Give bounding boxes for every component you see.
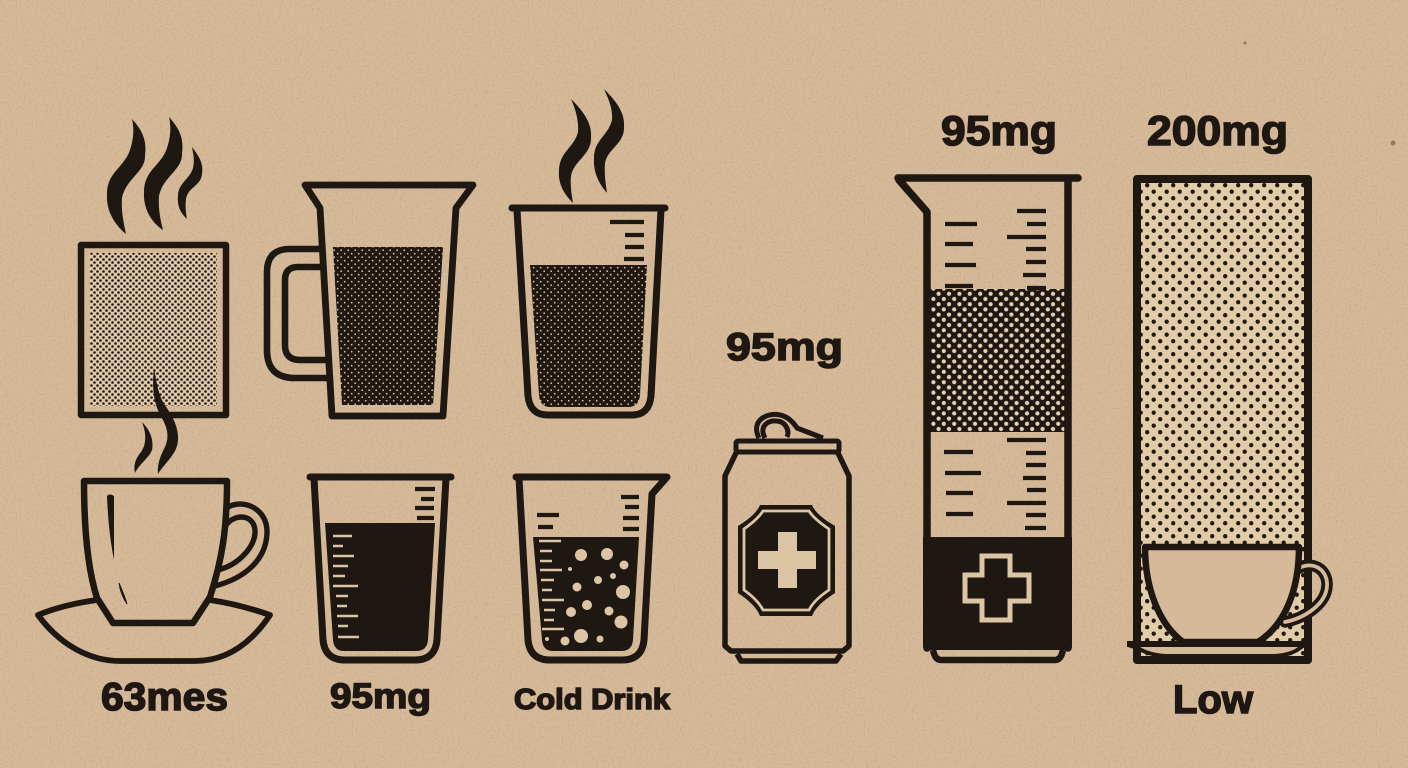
icon: cup steam [134, 368, 178, 474]
item: 200mg tall panel with cup [1127, 107, 1327, 722]
square mug halftone fill [90, 253, 217, 406]
cup saucer [1128, 645, 1304, 656]
cup handle over panel [1285, 565, 1327, 622]
label: 200mg: 200mg [1147, 107, 1288, 154]
label: 63mes: 63mes [101, 676, 228, 719]
item: steaming beaker with halftone [512, 89, 665, 415]
label: 95mg above can: 95mg [726, 326, 843, 369]
mug handle [267, 249, 330, 378]
item: beaker with small mug label [310, 477, 451, 716]
label: Low: Low [1173, 678, 1254, 722]
item: glass mug with handle [267, 185, 473, 416]
item: tall measuring beaker [898, 107, 1078, 660]
panel outline [1137, 179, 1308, 660]
steaming beaker ticks [610, 222, 644, 259]
tall beaker halftone band [927, 289, 1068, 432]
can lid [736, 441, 839, 452]
cold drink beaker outline [516, 477, 667, 660]
cold drink bubbles [545, 548, 630, 646]
can base [737, 654, 841, 661]
can body [725, 453, 849, 651]
steaming beaker liquid [530, 265, 647, 407]
tall beaker foot [933, 650, 1063, 660]
cup saucer [38, 600, 270, 661]
cup handle [215, 504, 267, 586]
cold drink upper ticks [537, 497, 639, 529]
item: coffee cup on saucer [38, 368, 270, 719]
cup highlights [107, 494, 127, 604]
saucer rim [1127, 641, 1304, 647]
icon: beaker steam [559, 89, 624, 203]
cup body [84, 481, 227, 623]
item: cold drink beaker with bubbles [514, 477, 671, 716]
beaker liquid scale ticks [333, 536, 359, 637]
can cross badge [738, 505, 835, 616]
label: 95mg: 95mg [330, 677, 431, 716]
beaker liquid solid [325, 523, 435, 651]
square mug outline [81, 245, 226, 415]
beaker outline [310, 477, 451, 660]
can pull tab [757, 414, 823, 438]
cup body [1145, 547, 1299, 642]
beaker top scale ticks [415, 489, 435, 518]
tall beaker cross [965, 556, 1029, 620]
mug outline [305, 185, 473, 416]
icon: steam above square mug [107, 117, 202, 234]
tall beaker upper ticks [945, 211, 1046, 288]
cold drink liquid ticks [539, 541, 564, 629]
mug dark halftone liquid [333, 247, 443, 405]
tall beaker dark base section [923, 537, 1072, 650]
label: Cold Drink: Cold Drink [514, 684, 671, 716]
item: steaming square mug with halftone [81, 117, 226, 415]
item: energy drink can [725, 326, 849, 661]
cold drink liquid [533, 537, 639, 651]
steaming beaker outline [512, 208, 665, 415]
tall beaker lower ticks [944, 440, 1046, 528]
panel halftone fill [1141, 183, 1304, 656]
label: 95mg above beaker: 95mg [941, 107, 1057, 154]
tall beaker outline [898, 178, 1078, 648]
